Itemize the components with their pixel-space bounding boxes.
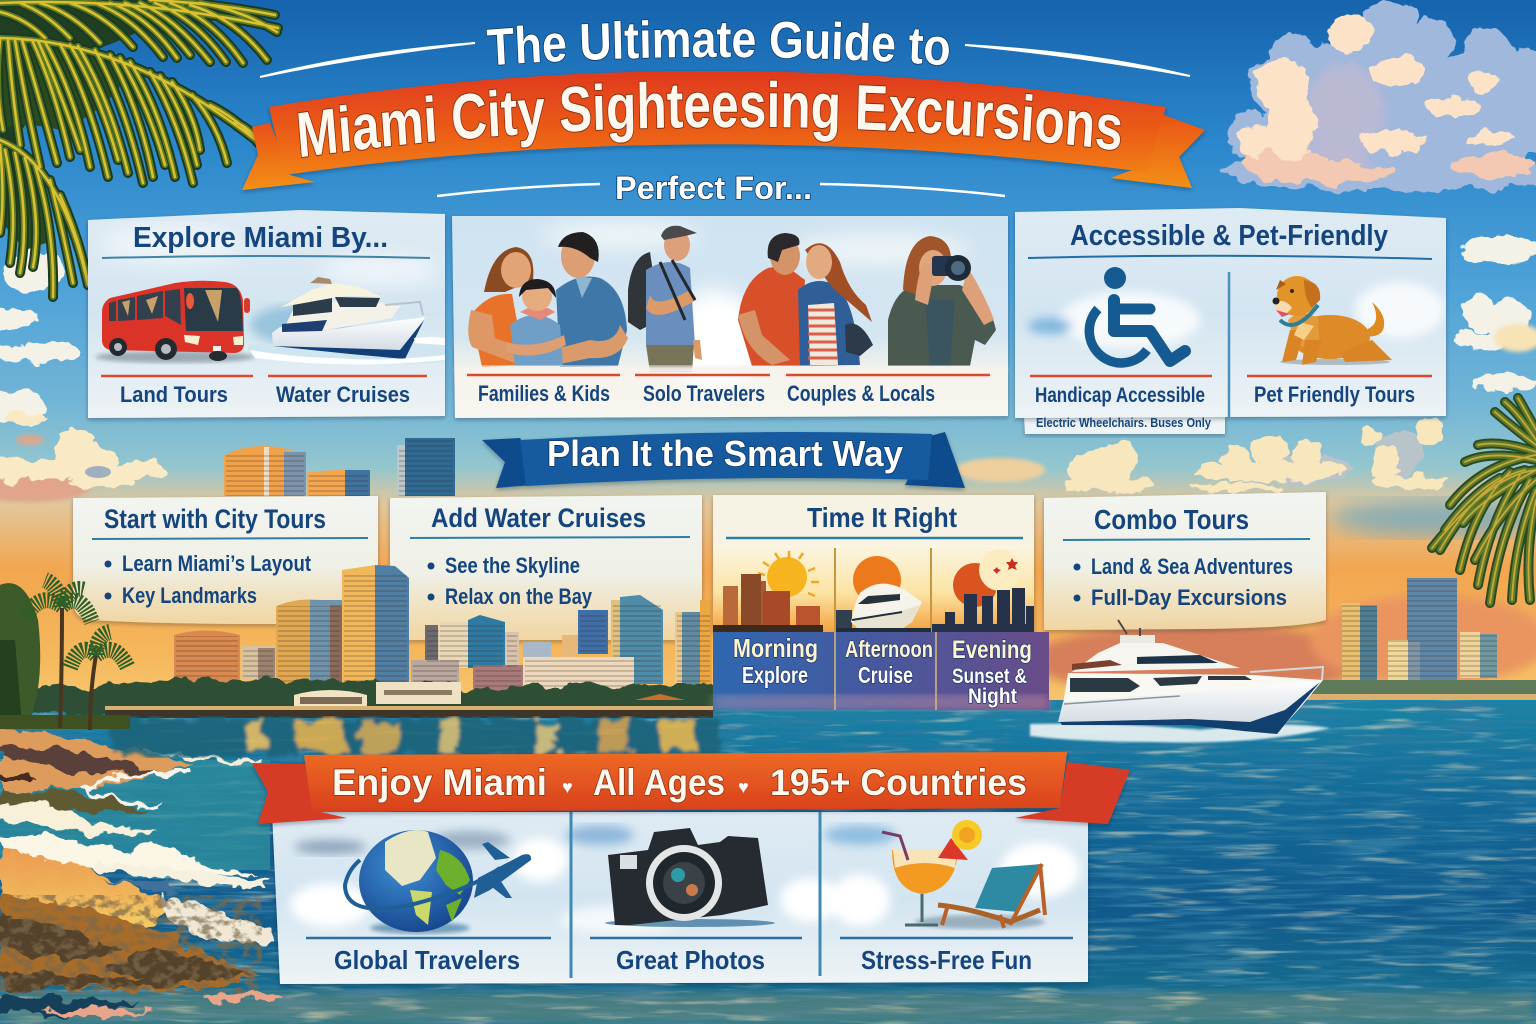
right horizon cloud bank: [955, 417, 1536, 536]
people: photographer: [888, 236, 996, 366]
title: the ultimate guide to: The Ultimate Guide to: [486, 19, 950, 66]
background: water: [0, 700, 1536, 1024]
label: solo travelers: Solo Travelers: [643, 381, 765, 406]
label: families and kids: Families & Kids: [478, 381, 610, 406]
bullet: key landmarks: Key Landmarks: [122, 583, 257, 608]
panel: bottom highlights: [272, 812, 1088, 984]
people: couple: [738, 233, 873, 366]
tree line: [30, 677, 715, 714]
label: handicap accessible: Handicap Accessible: [1035, 384, 1205, 407]
title: the ultimate guide to: [260, 19, 1190, 78]
label: afternoon: Afternoon: [845, 636, 933, 662]
background: distant skyline: [224, 438, 455, 496]
palm tree: right: [1432, 398, 1536, 603]
heart separator: ♥: [738, 777, 749, 797]
icon: globe and plane: [345, 830, 531, 934]
people: family: [468, 232, 628, 367]
yacht: foreground: [1030, 620, 1330, 742]
background: beach: [0, 730, 285, 1018]
label: couples and locals: Couples & Locals: [787, 381, 935, 406]
bullet: see the skyline: See the Skyline: [445, 553, 580, 578]
label: pet friendly tours: Pet Friendly Tours: [1254, 382, 1415, 407]
heading: add water cruises: Add Water Cruises: [431, 503, 646, 533]
panel: explore miami by: [88, 210, 445, 418]
icon: red bus: [95, 281, 255, 363]
main ribbon banner: [241, 70, 1206, 194]
label: great photos: Great Photos: [616, 945, 765, 975]
heading: accessible and pet-friendly: Accessible & Pet-Friendly: [1070, 220, 1388, 252]
background: top right clouds: [1220, 2, 1536, 190]
bullet: learn layout: Learn Miami’s Layout: [122, 551, 312, 576]
background: left palm trees: [0, 580, 130, 730]
background: sky: [0, 0, 1536, 730]
label: sunset and night: Sunset &: [952, 665, 1027, 688]
background: side and horizon clouds: [0, 235, 1536, 536]
panel: accessible and pet-friendly: [1015, 208, 1446, 434]
heading: explore miami by: Explore Miami By...: [133, 222, 388, 254]
bullet: relax on the bay: Relax on the Bay: [445, 584, 593, 609]
banner text: Plan It the Smart Way: [547, 433, 903, 474]
label: cruise: Cruise: [858, 662, 913, 688]
people: solo traveler: [628, 226, 702, 372]
label: stress-free fun: Stress-Free Fun: [861, 945, 1032, 975]
palm tree: top left: [0, 0, 278, 297]
bullet: full-day: Full-Day Excursions: [1091, 585, 1287, 610]
heading: time it right: Time It Right: [807, 502, 957, 533]
pavilion and waterfront buildings: [294, 690, 367, 710]
icon: camera: [605, 828, 775, 927]
icon: cocktail and beach chair: [882, 820, 1045, 929]
label: explore: Explore: [742, 662, 808, 688]
label: water cruises: Water Cruises: [276, 382, 410, 407]
label: land tours: Land Tours: [120, 382, 228, 407]
subheading: perfect for: Perfect For...: [615, 170, 812, 206]
panel: combo tours: [1044, 492, 1326, 630]
reflections: [110, 718, 720, 756]
heading: start with city tours: Start with City Tours: [104, 504, 326, 534]
label: global travelers: Global Travelers: [334, 945, 520, 975]
background: mauve sunset haze right: [1030, 595, 1536, 696]
panel: time it right: [713, 495, 1049, 710]
blue banner: plan it the smart way: [482, 432, 965, 488]
icon: afternoon ship: [836, 556, 931, 632]
bottom ribbon banner: [252, 752, 1130, 824]
left horizon cloud bank: [0, 413, 172, 502]
subheading: perfect for: [437, 170, 1005, 206]
icon: dog: [1272, 276, 1392, 365]
banner text: enjoy miami: Enjoy Miami: [332, 762, 547, 803]
icon: evening moon and skyline: [932, 549, 1034, 632]
heading: combo tours: Combo Tours: [1094, 504, 1249, 535]
panel: add water cruises: [390, 495, 702, 640]
panel: start with city tours: [73, 496, 378, 624]
ribbon title text: Miami City Sighteesing Excursions: [298, 80, 1122, 158]
skyline: left and center: [30, 565, 720, 756]
skyline: right: [1300, 578, 1536, 700]
icon: white cruise boat: [248, 277, 445, 365]
icon: morning sun and city: [713, 551, 823, 632]
label: morning: Morning: [733, 633, 818, 663]
banner text: all ages: All Ages: [593, 762, 725, 803]
time band: [713, 632, 1049, 710]
note: electric wheelchairs: Electric Wheelchairs. Buses Only: [1036, 415, 1212, 430]
icon: wheelchair: [1089, 267, 1185, 363]
label: sunset and night: Night: [968, 685, 1017, 708]
label: evening: Evening: [952, 636, 1032, 664]
heart separator: ♥: [562, 777, 573, 797]
panel: perfect for travelers: [452, 216, 1008, 418]
banner text: 195+ countries: 195+ Countries: [770, 762, 1027, 803]
pier: [105, 710, 713, 718]
bullet: land and sea: Land & Sea Adventures: [1091, 554, 1293, 579]
